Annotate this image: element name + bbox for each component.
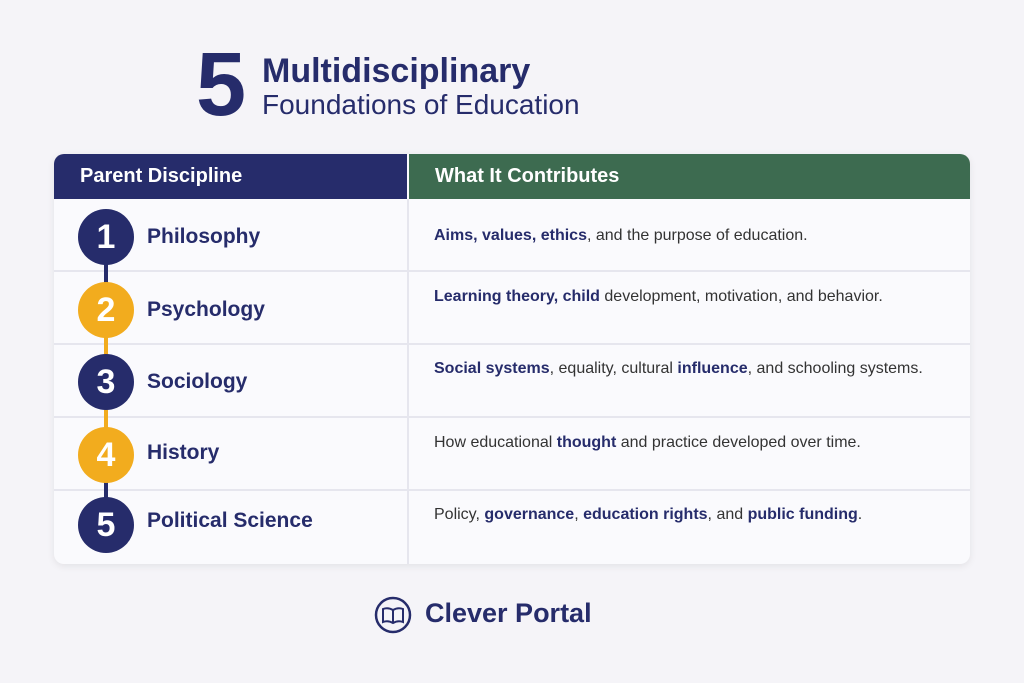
name: Political Science bbox=[147, 509, 313, 532]
circle 3: 3 bbox=[97, 363, 115, 401]
row 4 bbox=[78, 427, 861, 483]
desc: Policy, governance, education rights, and public funding. bbox=[434, 506, 862, 523]
name: Psychology bbox=[147, 298, 265, 321]
circle 2 bbox=[78, 282, 134, 338]
desc: How educational thought and practice developed over time. bbox=[434, 434, 861, 451]
circle 4: 4 bbox=[97, 436, 115, 474]
name: Sociology bbox=[147, 370, 247, 393]
circle 1: 1 bbox=[97, 218, 115, 256]
name: Philosophy bbox=[147, 225, 260, 248]
circle 2: 2 bbox=[97, 291, 115, 329]
header: what it contributes bbox=[409, 154, 970, 199]
title line 1: Multidisciplinary bbox=[262, 52, 530, 90]
row 1 bbox=[78, 209, 808, 265]
circle 4 bbox=[78, 427, 134, 483]
row 5 bbox=[78, 497, 862, 553]
footer logo bbox=[374, 596, 592, 634]
table bbox=[54, 154, 970, 564]
icon: book bbox=[374, 596, 412, 634]
row 2 bbox=[78, 282, 883, 338]
name: History bbox=[147, 441, 219, 464]
desc: Learning theory, child development, motivation, and behavior. bbox=[434, 288, 883, 305]
header: parent discipline bbox=[54, 154, 407, 199]
circle 1 bbox=[78, 209, 134, 265]
desc: Aims, values, ethics, and the purpose of education. bbox=[434, 227, 808, 244]
title bbox=[196, 35, 580, 135]
circle 5 bbox=[78, 497, 134, 553]
title line 2: Foundations of Education bbox=[262, 89, 580, 120]
connector line bbox=[104, 260, 108, 505]
circle 5: 5 bbox=[97, 506, 115, 544]
circle 3 bbox=[78, 354, 134, 410]
brand name: Clever Portal bbox=[425, 598, 592, 628]
desc: Social systems, equality, cultural influence, and schooling systems. bbox=[434, 360, 923, 377]
header: what it contributes: What It Contributes bbox=[435, 165, 619, 187]
big number 5: 5 bbox=[196, 35, 246, 135]
row 3 bbox=[78, 354, 923, 410]
header: parent discipline: Parent Discipline bbox=[80, 165, 242, 187]
